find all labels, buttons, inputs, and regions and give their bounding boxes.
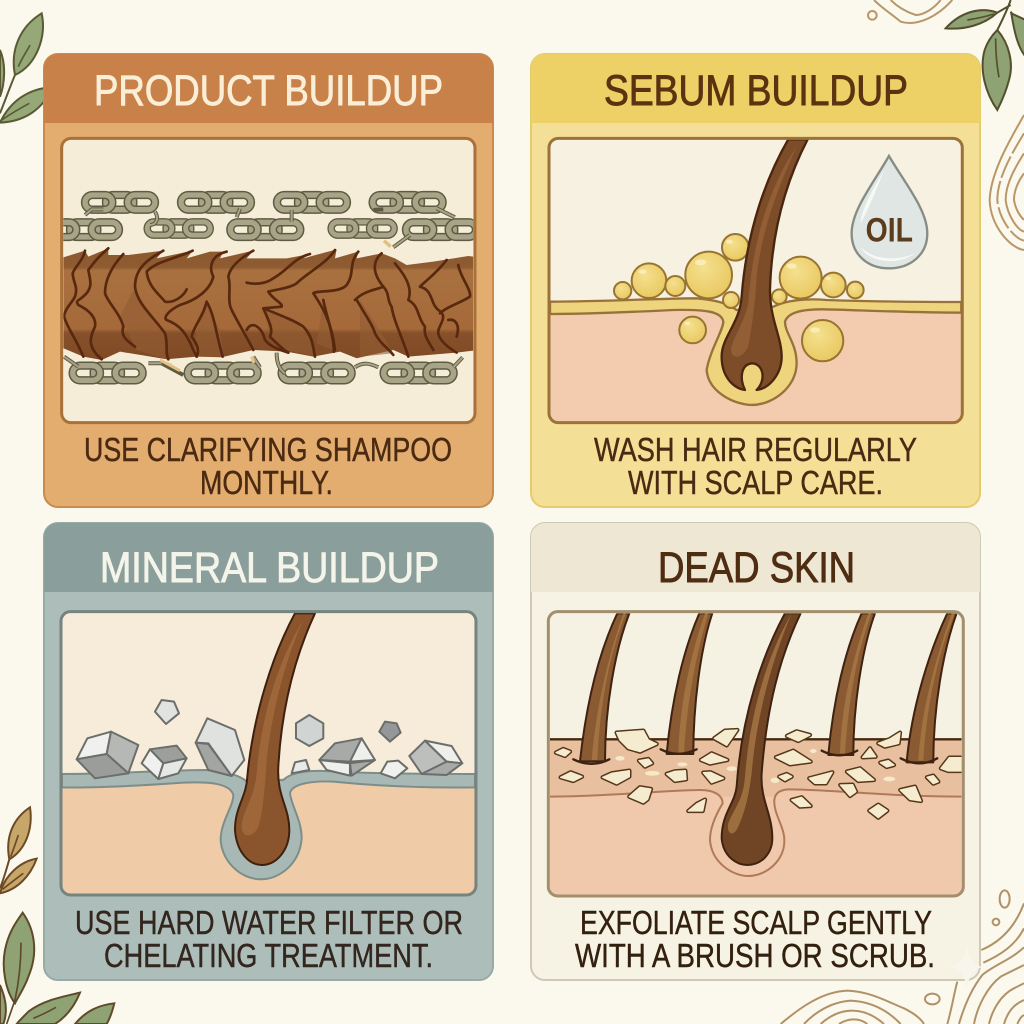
top-right leaf sprig <box>946 0 1024 110</box>
panel body <box>44 54 493 507</box>
advice text: WASH HAIR REGULARLY <box>594 431 917 468</box>
advice text: WITH A BRUSH OR SCRUB. <box>575 937 935 974</box>
hairs <box>580 613 957 865</box>
lower skin <box>550 796 962 894</box>
mineral crystals <box>77 700 462 779</box>
bottom-right decorative contour lines <box>781 890 1024 1024</box>
frayed fibre tips on the shaft <box>160 357 253 365</box>
illustration: flaking scalp <box>548 612 963 897</box>
cuticle cracks <box>64 248 470 359</box>
hair <box>722 139 808 390</box>
advice text: USE CLARIFYING SHAMPOO <box>84 431 452 468</box>
advice text: EXFOLIATE SCALP GENTLY <box>580 904 932 941</box>
sparkle mark at panel corner <box>948 945 982 990</box>
follicle sockets <box>573 749 937 764</box>
sebum layer <box>550 298 961 405</box>
heading: PRODUCT BUILDUP <box>94 67 443 115</box>
advice text <box>594 431 917 501</box>
skin flakes <box>556 730 962 818</box>
advice text: CHELATING TREATMENT. <box>104 937 433 974</box>
illustration: hair shaft with chains <box>49 138 476 423</box>
bottom-left leaf sprigs <box>0 807 114 1024</box>
advice text <box>75 904 463 974</box>
oil droplet <box>852 156 927 268</box>
header band <box>531 54 980 123</box>
hair shaft <box>63 248 473 360</box>
upper skin layer with follicle <box>550 740 962 796</box>
mineral layer <box>62 770 475 879</box>
hair <box>235 613 315 865</box>
panel body <box>44 523 493 980</box>
heading: SEBUM BUILDUP <box>604 67 908 115</box>
header band <box>44 523 493 592</box>
loose pale specks <box>615 749 895 783</box>
panel: sebum buildup <box>531 54 980 507</box>
header band <box>44 54 493 123</box>
skin <box>62 778 475 895</box>
panel body <box>531 54 980 507</box>
advice text: WITH SCALP CARE. <box>628 464 883 501</box>
illustration: mineral deposits around follicle <box>61 612 476 895</box>
heading: DEAD SKIN <box>658 544 855 592</box>
top-left leaf sprig <box>0 13 52 123</box>
top-right decorative contour lines <box>868 0 1024 250</box>
advice text <box>84 431 452 501</box>
skin <box>550 308 961 421</box>
panel: mineral buildup <box>44 523 493 980</box>
advice text: USE HARD WATER FILTER OR <box>75 904 463 941</box>
panel body <box>531 523 980 980</box>
advice text: MONTHLY. <box>200 464 333 501</box>
header band <box>531 523 980 592</box>
upper chains <box>49 195 476 247</box>
illustration: oily follicle <box>549 138 962 423</box>
heading: MINERAL BUILDUP <box>100 544 439 592</box>
sebum droplets <box>614 234 864 361</box>
panel: product buildup <box>44 54 493 507</box>
advice text <box>575 904 935 974</box>
lower chains <box>64 353 463 380</box>
oil label: OIL <box>866 211 913 249</box>
panel: dead skin <box>531 523 982 990</box>
raised cuticle scales <box>120 290 393 359</box>
